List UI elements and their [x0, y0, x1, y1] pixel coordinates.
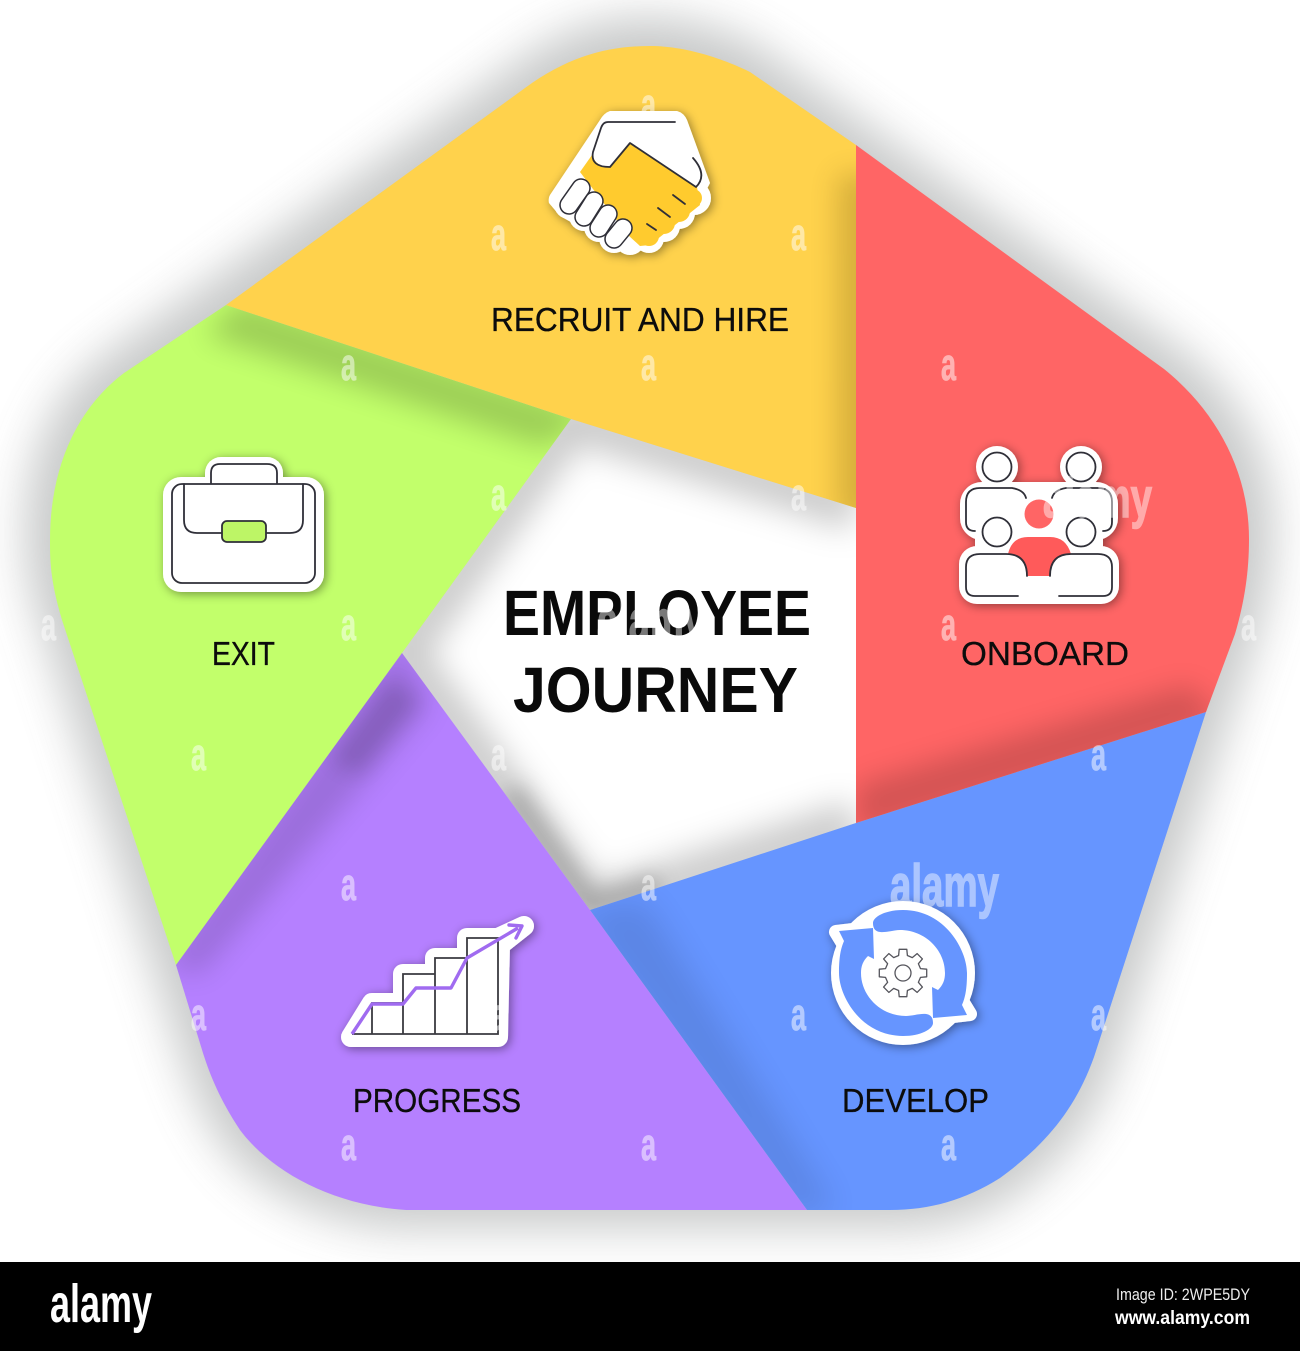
watermark marks: a [941, 339, 957, 390]
panel: develop shadow band [575, 900, 835, 1215]
watermark marks: a [641, 1119, 657, 1170]
label: develop: DEVELOP [842, 1082, 989, 1119]
title: JOURNEY [513, 654, 798, 726]
watermark marks: a [491, 989, 507, 1040]
watermark marks: a [1241, 599, 1257, 650]
watermark marks: a [1091, 729, 1107, 780]
watermark marks: alamy [890, 853, 999, 919]
label: recruit and hire: RECRUIT AND HIRE [491, 301, 789, 338]
panel: progress shadow band [165, 640, 430, 975]
title: EMPLOYEE [503, 577, 811, 649]
panel: develop (blue) [590, 712, 1206, 1210]
watermark marks: a [491, 469, 507, 520]
watermark marks: a [1091, 989, 1107, 1040]
panel: recruit shadow band [827, 165, 856, 508]
watermark marks: a [341, 599, 357, 650]
panel: recruit and hire (yellow) [226, 46, 856, 508]
watermark marks: alamy [1043, 466, 1152, 529]
fingers [569, 188, 623, 239]
watermark marks: a [191, 469, 207, 520]
gear [879, 949, 927, 997]
footer bar: alamy [50, 1274, 152, 1334]
watermark marks [41, 79, 1257, 1170]
panel: exit (green) [50, 305, 571, 965]
watermark marks: a [791, 469, 807, 520]
label: exit: EXIT [212, 635, 275, 672]
footer bar: Image ID: 2WPE5DY [1116, 1285, 1250, 1304]
icon: develop cycle gear [831, 901, 975, 1045]
panel: onboard (red) [856, 145, 1249, 823]
watermark marks: a [641, 339, 657, 390]
icon: progress chart [351, 925, 524, 1037]
label: onboard: ONBOARD [961, 635, 1129, 672]
watermark marks: a [191, 989, 207, 1040]
watermark marks: a [941, 1119, 957, 1170]
panel: exit shadow band [205, 300, 590, 448]
icon: briefcase [163, 457, 324, 592]
watermark marks: a [641, 79, 657, 130]
watermark marks: a [341, 339, 357, 390]
watermark marks: a [491, 729, 507, 780]
panel: progress (purple) [176, 653, 807, 1210]
panel: onboard shadow band [856, 685, 1220, 835]
watermark marks: a [341, 1119, 357, 1170]
footer bar: www.alamy.com [1114, 1308, 1250, 1329]
footer bar [0, 1262, 1300, 1351]
watermark marks: alamy [597, 589, 705, 654]
watermark marks: a [641, 859, 657, 910]
icon: onboard team [959, 446, 1119, 604]
title [503, 577, 811, 726]
center panel inner shadow [402, 419, 856, 910]
label: progress: PROGRESS [353, 1082, 521, 1119]
watermark marks: a [791, 989, 807, 1040]
watermark marks: a [791, 209, 807, 260]
watermark marks: a [941, 599, 957, 650]
icon: handshake [549, 111, 711, 255]
watermark marks: a [41, 599, 57, 650]
watermark marks: a [191, 729, 207, 780]
watermark marks: a [491, 209, 507, 260]
center white panel [402, 419, 856, 910]
watermark marks: a [341, 859, 357, 910]
